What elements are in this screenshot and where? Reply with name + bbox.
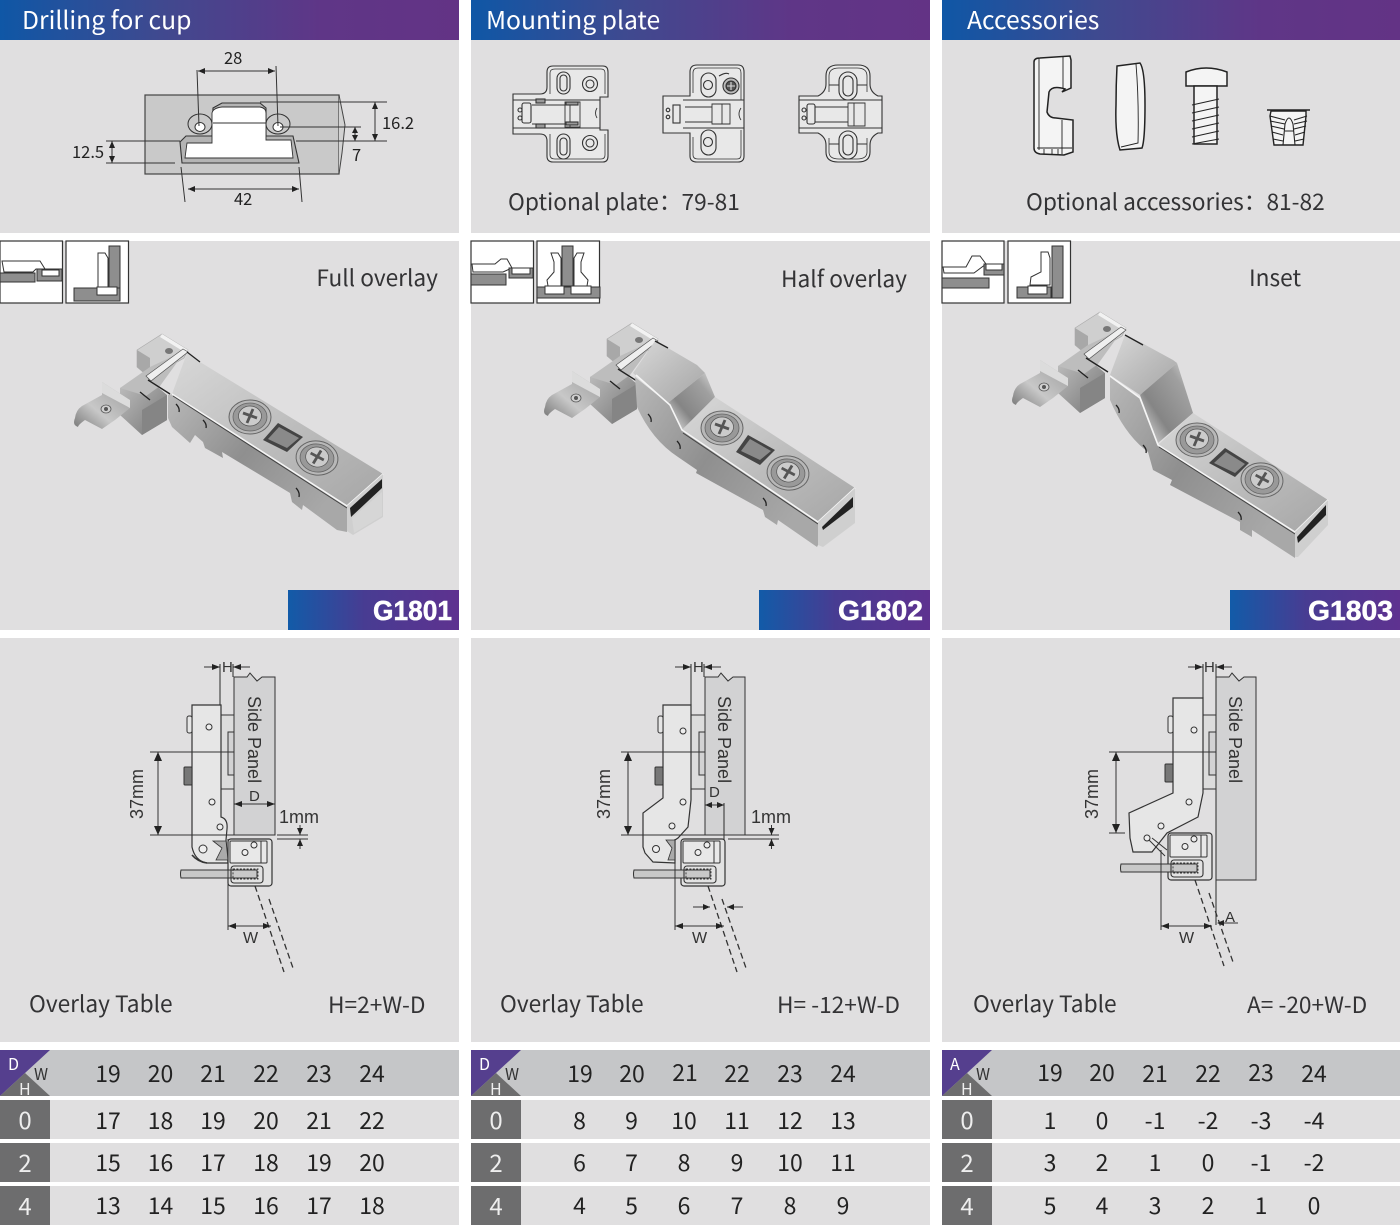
table values: 5 (1044, 1187, 1056, 1221)
badge: G1801 (288, 590, 459, 630)
diagram: full overlay section: W (243, 930, 259, 947)
diagram: half overlay section: H (693, 659, 704, 676)
row heads: 2 (18, 1144, 32, 1179)
table values: 23 (777, 1055, 803, 1089)
panel: accessories (942, 0, 1400, 233)
diagram: full overlay section: H (222, 659, 233, 676)
table values: 14 (148, 1187, 173, 1221)
table values: 24 (1301, 1055, 1327, 1089)
table values: 17 (306, 1187, 332, 1221)
heading: drilling for cup (0, 0, 459, 40)
table values: 21 (200, 1055, 226, 1089)
icon: full overlay side view (66, 241, 128, 303)
badge: G1803 (1230, 590, 1400, 630)
row heads (942, 1100, 992, 1225)
table values: 16 (253, 1187, 279, 1221)
table values: 20 (619, 1055, 645, 1089)
icon: half overlay top view (471, 241, 534, 303)
table values: 3 (1044, 1144, 1056, 1178)
table values: 21 (1142, 1055, 1168, 1089)
table values: 7 (625, 1144, 638, 1178)
panel: mounting plate (471, 0, 930, 233)
diagram: inset section: A (1225, 909, 1235, 926)
table: G1802 overlay (471, 1050, 930, 1225)
heading: accessories (942, 0, 1400, 40)
table values: 21 (672, 1054, 698, 1088)
table values: 19 (1037, 1054, 1063, 1088)
drawing: cup drilling dimensions: 28 (224, 45, 242, 69)
panel: G1801 full overlay (0, 241, 459, 630)
table values: 23 (306, 1055, 332, 1089)
badge: G1803: G1803 (1308, 595, 1393, 626)
icon: insert nut (1267, 110, 1310, 145)
icon: mounting plate 3 (799, 65, 882, 162)
table values: 20 (359, 1144, 385, 1178)
formula: H=2+W-D (328, 987, 425, 1020)
table values: 8 (573, 1102, 586, 1136)
label: inset: Inset (1249, 260, 1301, 293)
diagram: half overlay section: 37mm (594, 769, 614, 819)
table corner: D H W (0, 1050, 50, 1100)
table values: 19 (200, 1102, 226, 1136)
label: overlay table: Overlay Table (29, 986, 173, 1019)
table values: 7 (731, 1187, 743, 1221)
label: overlay table: Overlay Table (500, 986, 644, 1019)
panel: overlay diagram G1801 (0, 638, 459, 1042)
row heads: 0 (489, 1101, 503, 1136)
badge: G1802: G1802 (838, 595, 923, 626)
table values: 13 (830, 1102, 856, 1136)
table corner: A H W (942, 1050, 992, 1100)
icon: full overlay top view (0, 241, 62, 303)
table values: 19 (567, 1055, 593, 1089)
icon: mounting plate 2 (663, 65, 744, 162)
diagram: half overlay section: D (709, 784, 720, 801)
table corner: D H W: W (505, 1061, 519, 1085)
table values: 17 (200, 1144, 226, 1178)
table values: 8 (678, 1144, 690, 1178)
table values: 9 (625, 1102, 638, 1136)
table corner: D H W: D (479, 1051, 490, 1075)
table values: 12 (777, 1102, 803, 1136)
table values: 2 (1202, 1187, 1214, 1221)
diagram: full overlay section (127, 659, 319, 972)
table values: -2 (1304, 1144, 1324, 1178)
table values: 2 (1096, 1144, 1108, 1178)
icon: cover cap (1034, 56, 1073, 155)
caption: optional accessories: Optional accessories：81-82 (1026, 184, 1325, 217)
row heads (471, 1100, 521, 1225)
table values: 16 (148, 1144, 173, 1178)
table corner: D H W: D (8, 1051, 19, 1075)
icon: cover strip (1116, 63, 1145, 150)
table values: 17 (95, 1102, 121, 1136)
label: full overlay: Full overlay (316, 260, 438, 293)
table corner: A H W: H (961, 1076, 973, 1100)
table values: -4 (1304, 1102, 1325, 1136)
row heads: 0 (18, 1101, 32, 1136)
heading: mounting plate (471, 0, 930, 40)
table values: 18 (253, 1144, 279, 1178)
table values: 20 (253, 1102, 279, 1136)
diagram: inset section (1082, 659, 1256, 966)
table values: 11 (724, 1102, 750, 1136)
caption: optional plate: Optional plate：79-81 (508, 184, 740, 217)
table values: 1 (1149, 1144, 1161, 1178)
row heads: 0 (960, 1101, 974, 1136)
table values: 6 (678, 1187, 690, 1221)
table corner: D H W: H (19, 1076, 31, 1100)
table values: 6 (573, 1144, 586, 1178)
table values: 10 (777, 1144, 803, 1178)
row heads: 2 (960, 1144, 974, 1179)
table values: 0 (1096, 1102, 1108, 1136)
row heads: 4 (960, 1187, 974, 1222)
table: G1803 overlay (942, 1050, 1400, 1225)
diagram: full overlay section: D (249, 788, 260, 805)
icon: half overlay side view (537, 241, 600, 303)
table values: 20 (1089, 1054, 1115, 1088)
drawing: cup drilling dimensions: 12.5 (72, 139, 104, 163)
table values: 22 (724, 1055, 750, 1089)
drawing: cup drilling dimensions: 42 (234, 186, 252, 210)
table values (1037, 1054, 1327, 1221)
table values: 5 (625, 1187, 638, 1221)
photo: hinge G1801 (74, 334, 383, 535)
table values: 18 (148, 1102, 173, 1136)
table values: 3 (1149, 1187, 1161, 1221)
photo: hinge G1803 (1012, 312, 1328, 558)
table values: 0 (1202, 1144, 1214, 1178)
table values: 22 (253, 1055, 279, 1089)
drawing: cup drilling dimensions (72, 45, 414, 210)
table values: 20 (148, 1055, 173, 1089)
icon: mounting plate 1 (513, 66, 608, 162)
panel: G1802 half overlay (471, 241, 930, 630)
table values: -3 (1251, 1102, 1271, 1136)
table corner: D H W: H (490, 1076, 502, 1100)
table values: 4 (573, 1187, 586, 1221)
table values: 11 (830, 1144, 856, 1178)
table values: 10 (671, 1102, 697, 1136)
diagram: half overlay section: 1mm (751, 807, 791, 827)
photo: hinge G1802 (544, 323, 855, 547)
diagram: inset section: H (1204, 659, 1215, 676)
row heads: 2 (489, 1144, 503, 1179)
badge: G1802 (759, 590, 930, 630)
table values: 15 (200, 1187, 226, 1221)
row heads (0, 1100, 50, 1225)
table values: 8 (784, 1187, 796, 1221)
icon: inset top view (942, 241, 1004, 303)
label: overlay table: Overlay Table (973, 986, 1117, 1019)
table values: 19 (306, 1144, 332, 1178)
panel: overlay diagram G1802 (471, 638, 930, 1042)
table values: 21 (306, 1102, 332, 1136)
label: half overlay: Half overlay (781, 261, 907, 294)
diagram: full overlay section: Side Panel (244, 696, 264, 783)
table values: 15 (95, 1144, 121, 1178)
badge: G1801: G1801 (373, 595, 452, 626)
table values: 1 (1044, 1102, 1056, 1136)
row heads: 4 (489, 1187, 503, 1222)
table values: 13 (95, 1187, 121, 1221)
table values: 23 (1248, 1054, 1274, 1088)
table values: -1 (1251, 1144, 1271, 1178)
diagram: inset section: W (1179, 930, 1195, 947)
table values: 24 (359, 1055, 385, 1089)
row heads: 4 (18, 1187, 32, 1222)
formula: H= -12+W-D (777, 987, 900, 1020)
panel: drilling for cup (0, 0, 459, 233)
drawing: cup drilling dimensions: 16.2 (382, 110, 414, 134)
panel: G1803 inset (942, 241, 1400, 630)
table values (567, 1054, 856, 1221)
formula: A= -20+W-D (1247, 987, 1367, 1020)
diagram: half overlay section: W (692, 930, 708, 947)
table values: 19 (95, 1055, 121, 1089)
heading: mounting plate: Mounting plate (486, 1, 660, 37)
table values (95, 1055, 385, 1221)
panel: overlay diagram G1803 (942, 638, 1400, 1042)
table values: 1 (1255, 1187, 1267, 1221)
table corner: D H W (471, 1050, 521, 1100)
drawing: cup drilling dimensions: 7 (352, 142, 361, 166)
table values: 0 (1308, 1187, 1320, 1221)
table corner: A H W: A (950, 1051, 960, 1075)
table values: 9 (731, 1144, 743, 1178)
table corner: D H W: W (34, 1061, 48, 1085)
table values: 24 (830, 1055, 856, 1089)
heading: accessories: Accessories (967, 1, 1099, 37)
table values: 22 (359, 1102, 385, 1136)
diagram: half overlay section (594, 659, 791, 972)
table values: 4 (1096, 1187, 1109, 1221)
diagram: half overlay section: Side Panel (714, 696, 734, 783)
table corner: A H W: W (976, 1061, 990, 1085)
table values: 9 (837, 1187, 849, 1221)
icon: screw (1186, 68, 1227, 144)
table values: 22 (1195, 1055, 1221, 1089)
diagram: full overlay section: 37mm (127, 769, 147, 819)
diagram: full overlay section: 1mm (279, 807, 319, 827)
diagram: inset section: Side Panel (1225, 696, 1245, 783)
icon: inset side view (1008, 241, 1070, 303)
table values: -1 (1145, 1102, 1165, 1136)
diagram: inset section: 37mm (1082, 769, 1102, 819)
table values: 18 (359, 1187, 385, 1221)
table: G1801 overlay (0, 1050, 459, 1225)
heading: drilling for cup: Drilling for cup (22, 1, 191, 37)
table values: -2 (1198, 1102, 1218, 1136)
